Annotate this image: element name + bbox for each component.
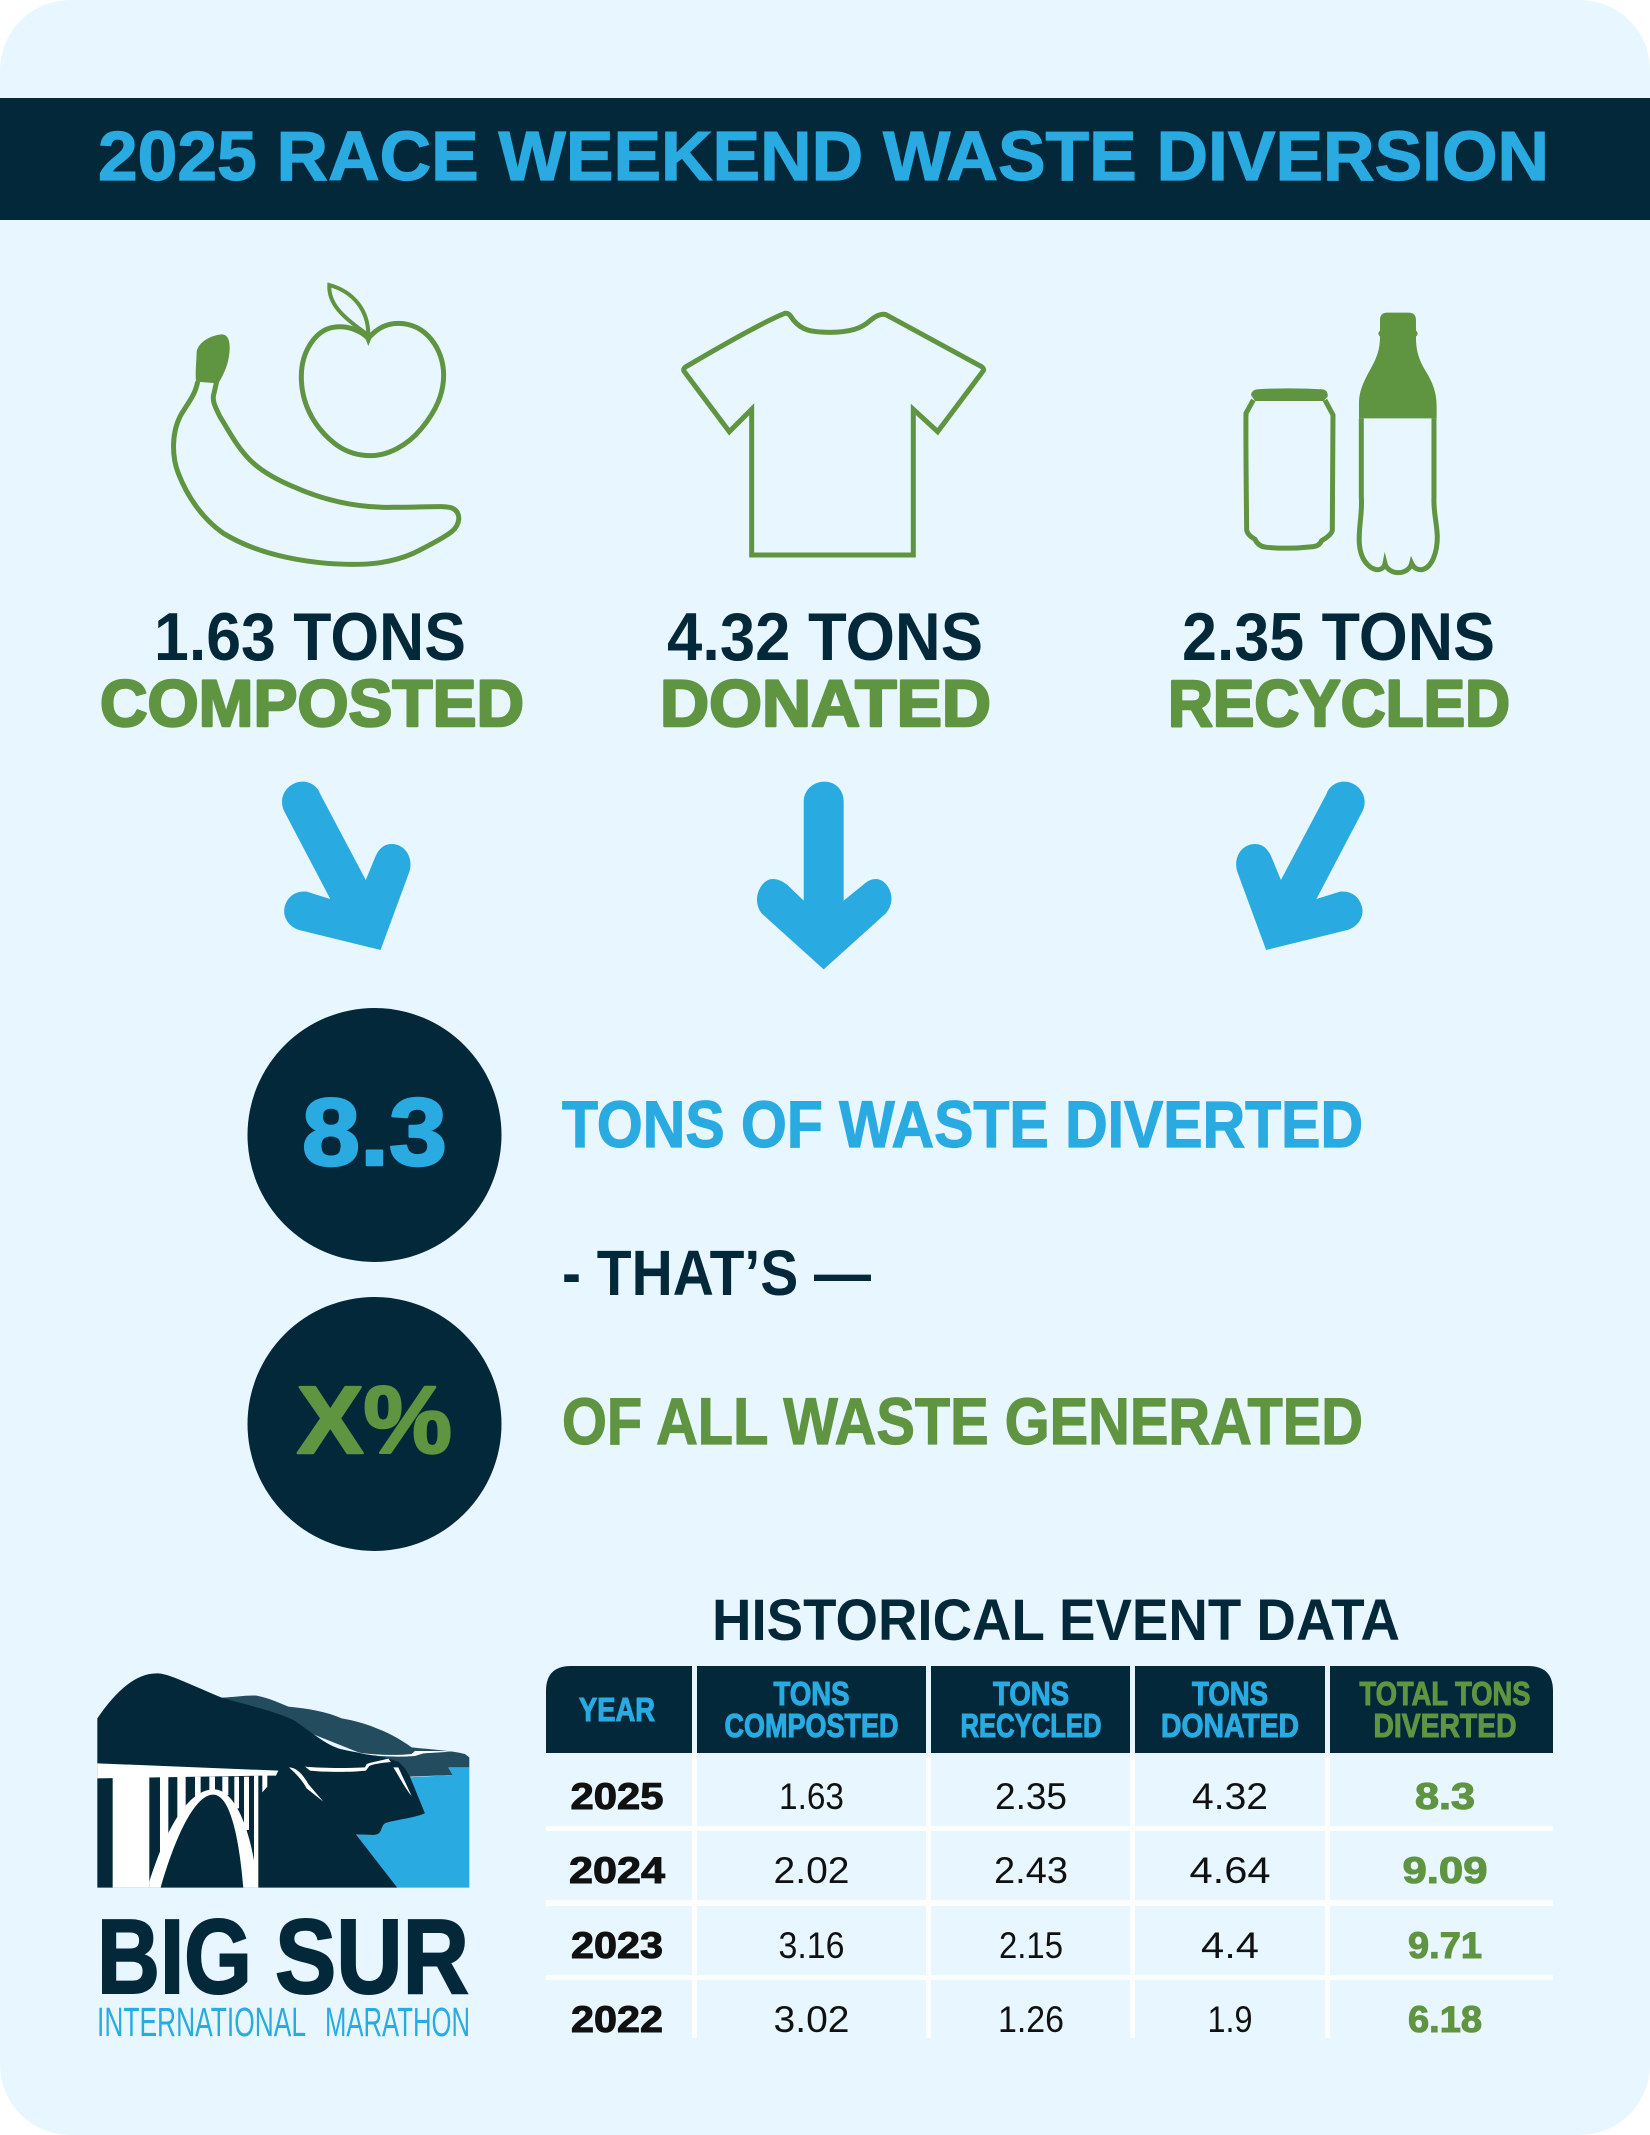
panel: donated [660,313,991,740]
icon: can and bottle [1246,313,1437,573]
table row: 2024: 2.43 [994,1850,1068,1891]
table header row: TONS [774,1675,850,1712]
recycled tonnage: 2.35 TONS [1182,599,1495,675]
table header row: TONS [993,1675,1069,1712]
table row: 2022: 1.9 [1208,1999,1252,2040]
text: of all waste generated: OF ALL WASTE GENERATED [562,1384,1363,1458]
table header row: TOTAL TONS [1360,1675,1530,1712]
badge: x percent [248,1297,502,1551]
icon: t-shirt [684,313,984,555]
table row: 2022 [571,1999,1482,2040]
text: that's: - THAT’S — [562,1237,871,1309]
donated tonnage: 4.32 TONS [667,599,983,675]
logo wordmark: SUR [275,1898,469,2016]
table header row: YEAR [579,1691,655,1728]
table row: 2022: 1.26 [998,1999,1064,2040]
text: tons of waste diverted: TONS OF WASTE DIVERTED [562,1087,1363,1161]
table row: 2025: 1.63 [779,1776,844,1817]
panel: recycled [1168,313,1510,740]
table row: 2025: 2.35 [995,1776,1067,1817]
table row: 2024: 4.64 [1190,1850,1270,1891]
table row: 2025: 8.3 [1415,1776,1475,1817]
table header row: RECYCLED [960,1707,1102,1744]
arrow: left, pointing down-right [282,782,411,950]
table row: 2022: 3.02 [774,1999,850,2040]
table row: 2024 [569,1850,1488,1891]
badge: x percent: X% [297,1367,452,1474]
table row: 2023: 9.71 [1408,1925,1482,1966]
composted tonnage: 1.63 TONS [154,599,466,675]
title banner [0,98,1650,220]
badge: 8.3 tons [248,1008,502,1262]
table row: 2024: 2024 [569,1850,665,1891]
table row: 2025 [570,1776,1475,1817]
logo subtitle: MARATHON [325,1999,470,2045]
table heading: HISTORICAL EVENT DATA [712,1588,1400,1653]
badge: 8.3 tons: 8.3 [302,1079,447,1186]
logo wordmark: BIG [97,1898,252,2016]
table header row: DIVERTED [1374,1707,1516,1744]
table row: 2024: 9.09 [1402,1850,1488,1891]
table row: 2024: 2.02 [774,1850,850,1891]
table row: 2025: 4.32 [1192,1776,1268,1817]
arrow: centre, pointing down [757,782,891,969]
table header row [546,1666,1553,1753]
logo artwork: mountains, bridge and ocean [97,1673,469,1888]
table row: 2023 [571,1925,1482,1966]
title banner: 2025 RACE WEEKEND WASTE DIVERSION [98,117,1549,195]
table header row: COMPOSTED [724,1707,898,1744]
logo wordmark [97,1898,469,2016]
table header row: TONS [1192,1675,1268,1712]
table row: 2023: 3.16 [778,1925,844,1966]
table row: 2023: 2023 [571,1925,663,1966]
table row: 2025: 2025 [570,1776,664,1817]
table row: 2022: 6.18 [1408,1999,1482,2040]
recycled label: RECYCLED [1168,666,1510,740]
table: historical event data [546,1666,1553,2040]
donated label: DONATED [660,666,991,740]
arrow: right, pointing down-left [1236,782,1365,950]
table row: 2023: 2.15 [999,1925,1063,1966]
panel: composted [100,285,524,740]
logo subtitle: INTERNATIONAL [97,1999,306,2045]
composted label: COMPOSTED [100,666,524,740]
logo: Big Sur International Marathon [97,1673,470,2045]
table row: 2023: 4.4 [1201,1925,1259,1966]
table row: 2022: 2022 [571,1999,663,2040]
table header row: DONATED [1161,1707,1299,1744]
icon: banana and apple [174,285,459,564]
